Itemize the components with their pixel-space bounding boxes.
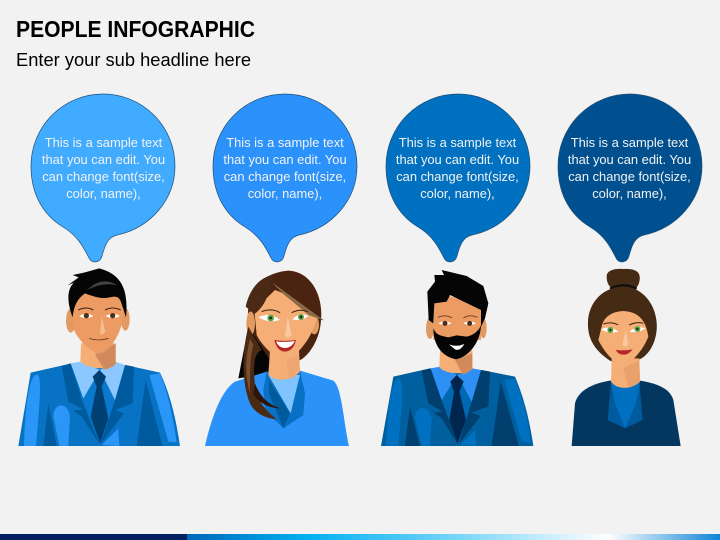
speech bubble 2: can change font(size, bbox=[224, 169, 346, 184]
speech bubble 3: color, name), bbox=[420, 186, 495, 201]
speech bubble 1: color, name), bbox=[66, 186, 141, 201]
speech bubble 4: can change font(size, bbox=[568, 169, 691, 184]
ears and face bbox=[426, 318, 434, 339]
neck bbox=[611, 358, 640, 388]
neck bbox=[80, 343, 116, 368]
speech bubble 1: can change font(size, bbox=[42, 169, 165, 184]
speech bubble 1: that you can edit. You bbox=[42, 152, 165, 167]
eyes, brows, mouth bbox=[438, 316, 477, 350]
speech bubble 2: This is a sample text bbox=[226, 135, 344, 150]
title: PEOPLE INFOGRAPHIC bbox=[16, 16, 255, 42]
jacket bbox=[572, 381, 681, 446]
person 1: man in suit bbox=[18, 268, 180, 446]
back hair bbox=[238, 327, 270, 378]
speech bubble 3: that you can edit. You bbox=[396, 152, 519, 167]
neck bbox=[439, 350, 472, 373]
speech bubble 2: color, name), bbox=[248, 186, 322, 201]
hair bbox=[588, 287, 657, 362]
person 2: woman with ponytail bbox=[205, 271, 349, 446]
hair bbox=[68, 268, 127, 317]
hair bun bbox=[607, 269, 640, 289]
face bbox=[598, 311, 648, 365]
ears and face bbox=[246, 311, 255, 335]
eyes, brows, nose, mouth bbox=[601, 323, 645, 355]
speech bubble 3: can change font(size, bbox=[396, 169, 519, 184]
speech bubble 4: color, name), bbox=[592, 186, 667, 201]
front hair bbox=[246, 275, 273, 314]
tie bbox=[449, 375, 466, 443]
speech bubble 2 bbox=[213, 94, 357, 262]
speech bubble 1: This is a sample text bbox=[45, 135, 163, 150]
person 4: woman with hair bun bbox=[572, 269, 681, 446]
subtitle: Enter your sub headline here bbox=[16, 49, 251, 70]
tie bbox=[91, 370, 108, 443]
eyes, brows, nose, mouth bbox=[78, 308, 121, 340]
speech bubble 3 bbox=[386, 94, 530, 262]
ponytail bbox=[244, 327, 277, 419]
speech bubble 4 bbox=[558, 94, 702, 262]
suit bbox=[381, 368, 533, 446]
speech bubble 4: that you can edit. You bbox=[568, 152, 691, 167]
suit bbox=[18, 363, 180, 446]
eyes, brows, nose, mouth bbox=[258, 310, 308, 352]
top bbox=[205, 371, 349, 446]
person 3: bearded man in suit bbox=[381, 270, 533, 446]
beard bbox=[433, 325, 481, 359]
ears and face bbox=[66, 309, 75, 333]
hair bbox=[427, 270, 488, 327]
neck bbox=[268, 350, 300, 380]
speech bubble 1 bbox=[31, 94, 175, 262]
speech bubble 4: This is a sample text bbox=[571, 135, 689, 150]
footer bar bbox=[0, 534, 720, 540]
speech bubble 2: that you can edit. You bbox=[223, 152, 347, 167]
speech bubble 3: This is a sample text bbox=[399, 135, 517, 150]
